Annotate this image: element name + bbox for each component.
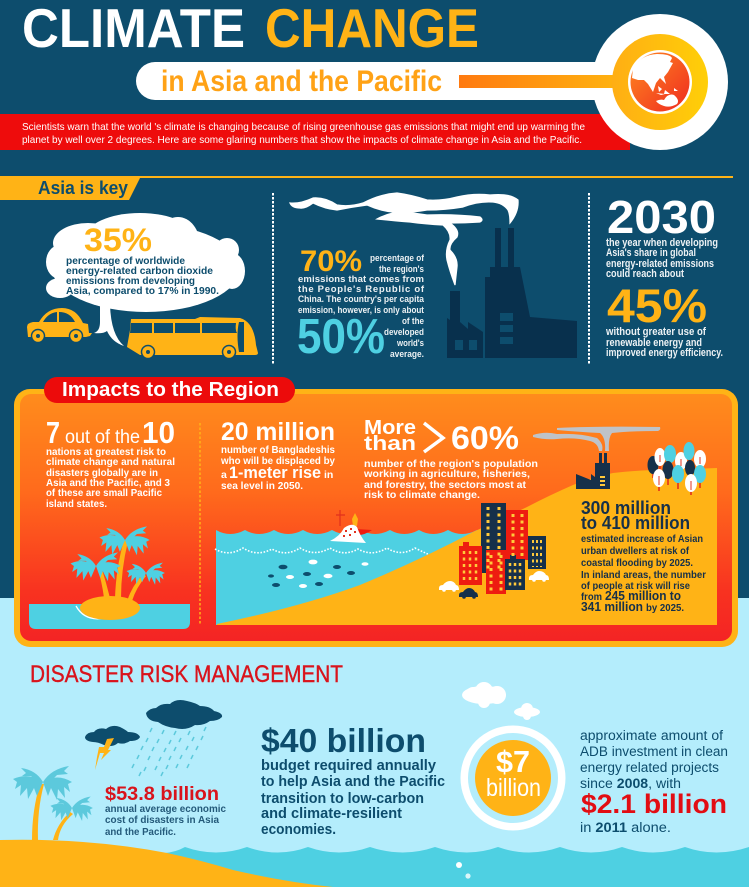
stat: 7 out of the 10: out of the — [65, 427, 140, 448]
text: population share: working in agriculture, fisheries, — [363, 468, 530, 480]
text: 2030 description: the year when developing — [606, 237, 718, 249]
text: urban dwellers at risk: by 2025. — [646, 602, 684, 614]
text: 2030 description: Asia's share in global — [606, 247, 696, 259]
panel: 70% and 50% stats — [297, 245, 425, 364]
text: 35% description: percentage of worldwide — [66, 255, 185, 267]
text: 35% description: energy-related carbon dioxide — [66, 265, 213, 277]
background: navy upper section — [0, 0, 749, 598]
text: at-risk nations: climate change and natural — [46, 456, 175, 468]
stat: 7 out of the 10 — [46, 415, 175, 450]
text: budget required — [261, 758, 445, 838]
text: 45% description: renewable energy and — [606, 337, 702, 349]
text: region emissions: world's — [396, 338, 424, 349]
text: ADB investment: in 2011 alone. — [580, 820, 671, 835]
text: 45% description — [605, 326, 723, 359]
stat: 20 million: 20 million — [221, 418, 335, 446]
callout: $7 billion circle — [460, 726, 566, 830]
text: budget required: budget required annually — [261, 758, 436, 774]
icon: smoke — [290, 193, 518, 285]
heading: impacts to the region: Impacts to the Region — [62, 379, 279, 401]
panel: impacts to the region — [14, 377, 738, 647]
text: region emissions: emission, however, is only about — [298, 305, 425, 316]
icon: grey smoke — [533, 427, 660, 451]
illustration: lower sea — [165, 847, 749, 887]
background: light blue lower section — [0, 598, 749, 887]
text: region emissions: emissions that comes from — [298, 274, 424, 285]
stat: 300 to 410 million: to 410 million — [581, 513, 690, 533]
text: Bangladeshis displaced: number of Bangladeshis — [221, 444, 335, 456]
stat: 2030: 2030 — [607, 191, 716, 243]
icon: small cars — [439, 571, 549, 599]
wave line — [215, 548, 430, 555]
panel: 35% cloud — [46, 213, 245, 346]
text: Bangladeshis displaced: 1-meter rise — [229, 463, 321, 482]
text: region emissions: percentage of — [370, 253, 425, 264]
icon: factory — [447, 228, 577, 358]
text: 35% description: emissions from developing — [66, 275, 195, 287]
stat: 70%: 70% — [300, 245, 362, 278]
text: region emissions: the People's Republic of — [298, 284, 425, 295]
stat: 300 to 410 million: 300 million — [581, 498, 671, 518]
text: Bangladeshis displaced: in — [324, 469, 333, 481]
text: at-risk nations: island states. — [46, 498, 107, 510]
stat: 45%: 45% — [607, 279, 707, 332]
text: ADB investment: approximate amount of — [580, 728, 723, 743]
icon: small factory — [576, 453, 610, 489]
text: 35% description — [66, 255, 219, 297]
panel: 2030 and 45% stats — [605, 191, 723, 359]
text: urban dwellers at risk: In inland areas, the number — [581, 569, 706, 581]
intro banner — [0, 114, 630, 150]
icon: speech cloud — [46, 213, 245, 346]
text: ADB investment: energy related projects — [580, 760, 719, 775]
text: 2030 description — [606, 237, 718, 280]
text: ADB investment: since 2008, with — [580, 776, 681, 791]
text: Bangladeshis displaced — [220, 444, 335, 492]
icon: boat — [330, 510, 372, 543]
stat: 7 out of the 10: 10 — [142, 415, 175, 450]
icon: city buildings — [459, 503, 546, 594]
text: ADB investment — [580, 728, 728, 835]
text: disaster cost: cost of disasters in Asia — [105, 815, 219, 826]
icon: palm island — [29, 526, 190, 629]
text: region emissions: the region's — [379, 264, 424, 275]
text: ADB investment: ADB investment in clean — [580, 744, 728, 759]
icon: beach palms — [13, 766, 93, 840]
stat: 7 out of the 10: 7 — [46, 415, 60, 450]
illustration: sand hill — [217, 468, 717, 625]
icon: fish school — [268, 560, 368, 588]
stat: $53.8 billion: $53.8 billion — [105, 783, 219, 805]
text: disaster cost: and the Pacific. — [105, 827, 176, 838]
stat: more than 60%: More — [364, 417, 416, 439]
icon: globe medallion — [459, 14, 728, 150]
section heading: Asia is key — [0, 176, 733, 200]
stat: more than 60% — [364, 417, 519, 456]
text: Bangladeshis displaced: a — [221, 469, 227, 481]
text: urban dwellers at risk: estimated increase of Asian — [581, 533, 703, 545]
text: population share: number of the region's population — [364, 458, 538, 470]
stat: 35%: 35% — [84, 222, 152, 258]
illustration: sea with fish — [215, 510, 477, 625]
title — [22, 0, 479, 59]
text: 45% description: without greater use of — [605, 326, 706, 338]
text: urban dwellers at risk: 341 million — [581, 599, 643, 614]
text: urban dwellers at risk — [581, 533, 706, 614]
illustration: lower sand — [0, 840, 333, 887]
text: 2030 description: could reach about — [606, 268, 684, 280]
icon: storm clouds — [85, 700, 222, 776]
text: budget required: and climate-resilient — [261, 806, 402, 822]
icon: bubbles — [456, 862, 471, 879]
text: disaster cost — [105, 804, 226, 838]
callout: $7 billion circle: billion — [486, 774, 541, 802]
text: urban dwellers at risk: of people at risk will rise — [581, 580, 690, 592]
text: population share: and forestry, the sectors most at — [364, 479, 526, 491]
stat: 50%: 50% — [297, 310, 385, 364]
text: 45% description: improved energy efficiency. — [606, 347, 723, 359]
text: at-risk nations: Asia and the Pacific, and 3 — [46, 477, 170, 489]
stat: $2.1 billion: $2.1 billion — [581, 789, 727, 819]
text: 35% description: Asia, compared to 17% in 1990. — [66, 285, 219, 297]
text: budget required: transition to low-carbon — [261, 791, 424, 807]
text: population share — [363, 458, 538, 501]
text: at-risk nations — [46, 446, 175, 510]
stat: more than 60%: than — [364, 433, 416, 455]
text: urban dwellers at risk: 245 million to — [605, 588, 681, 603]
text: Bangladeshis displaced: sea level in 2050. — [221, 480, 303, 492]
text: budget required: to help Asia and the Pacific — [261, 774, 445, 790]
section heading: Asia is key: Asia is key — [38, 178, 128, 198]
text: 2030 description: energy-related emissions — [606, 258, 714, 270]
subtitle pill — [136, 62, 636, 100]
icon: white clouds — [462, 682, 540, 720]
text: region emissions: developed — [384, 327, 424, 338]
callout: $7 billion circle: $7 — [496, 744, 530, 779]
text: at-risk nations: nations at greatest risk to — [46, 446, 166, 458]
text: disaster cost: annual average economic — [105, 804, 226, 815]
text: at-risk nations: of these are small Pacific — [46, 487, 162, 499]
subtitle pill: in Asia and the Pacific — [161, 65, 442, 98]
icon: forest — [648, 442, 706, 495]
heading: disaster risk management: DISASTER RISK MANAGEMENT — [30, 661, 343, 688]
text: urban dwellers at risk: urban dwellers at risk of — [581, 545, 689, 557]
intro banner: planet by well over 2 degrees. Here are some glaring numbers that show the impacts of climate change in Asia and the Pacific. — [22, 134, 582, 146]
text: budget required: economies. — [261, 822, 336, 838]
text: region emissions: of the — [402, 316, 424, 327]
text: population share: risk to climate change. — [364, 489, 480, 501]
stat: 300 to 410 million — [581, 498, 690, 533]
text: region emissions — [298, 253, 425, 360]
icon: car — [27, 308, 92, 342]
text: urban dwellers at risk: from — [581, 591, 602, 603]
text: at-risk nations: disasters globally are in — [46, 467, 158, 479]
intro banner: Scientists warn that the world 's climate is changing because of rising greenhouse gas emissions that might end up warming the — [22, 121, 585, 133]
text: Bangladeshis displaced: who will be displaced by — [220, 455, 335, 467]
icon: bus — [127, 317, 258, 358]
stat: more than 60%: 60% — [451, 420, 519, 456]
stat: $40 billion: $40 billion — [261, 722, 426, 759]
text: region emissions: China. The country's per capita — [298, 294, 425, 305]
text: region emissions: average. — [390, 349, 424, 360]
text: urban dwellers at risk: coastal flooding by 2025. — [581, 557, 693, 569]
